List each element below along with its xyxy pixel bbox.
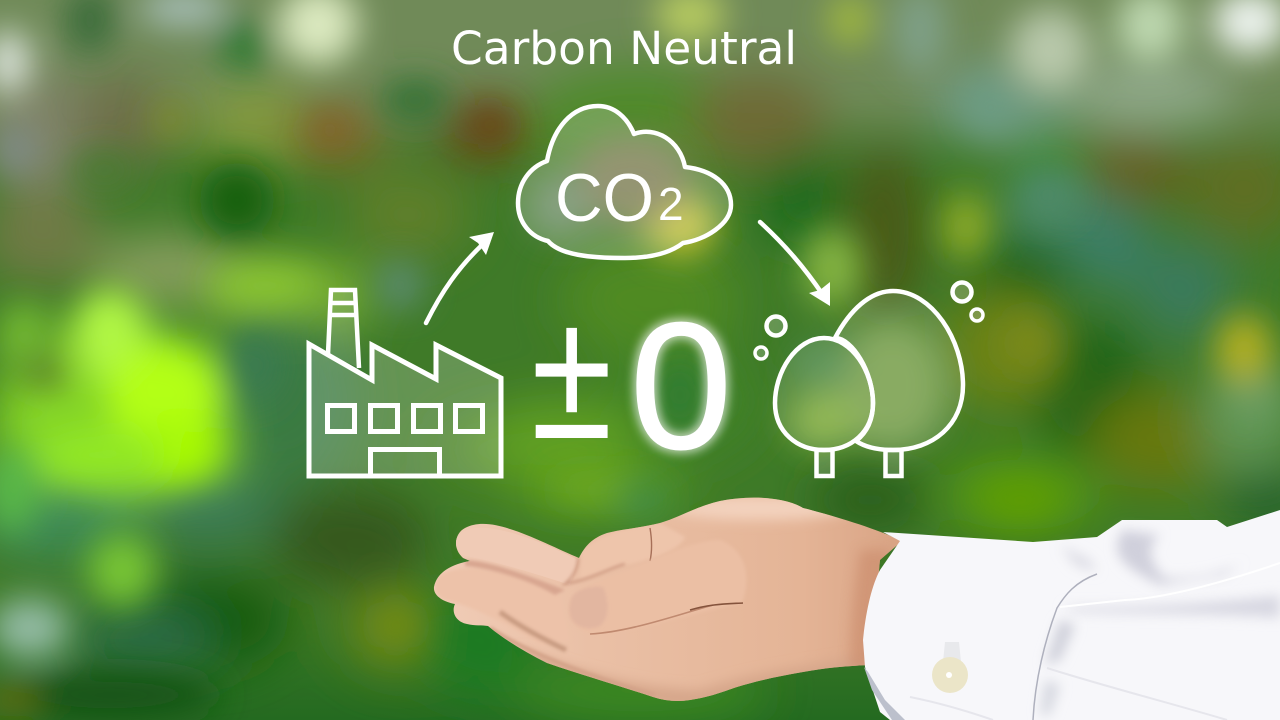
title: Carbon Neutral xyxy=(451,22,797,75)
icon: CO2 cloud: CO xyxy=(555,160,654,236)
cuff underside xyxy=(864,667,905,720)
arrow: factory to cloud xyxy=(426,232,494,323)
plus-minus sign: ± xyxy=(531,271,612,478)
index finger base xyxy=(580,522,682,560)
fingers xyxy=(456,535,577,582)
thumb nail xyxy=(572,588,606,626)
icon: CO2 cloud: 2 xyxy=(658,178,684,230)
icon: CO2 cloud xyxy=(518,106,731,258)
factory chimney xyxy=(328,290,359,368)
lower palm shading xyxy=(523,650,865,701)
top of hand highlight xyxy=(670,496,850,520)
zero numeral with glow: 0 xyxy=(630,286,732,487)
hand xyxy=(434,498,900,701)
hairy knuckle crease xyxy=(500,612,566,650)
zero numeral with glow: 0 xyxy=(630,286,732,487)
finger shadow xyxy=(565,558,625,584)
shirt button xyxy=(932,642,968,693)
cuff seam xyxy=(1033,574,1097,720)
factory windows xyxy=(328,406,482,476)
thumb crease xyxy=(590,605,713,634)
icon: trees xyxy=(755,282,983,476)
wrist shading xyxy=(850,550,890,670)
plus-minus sign: ± xyxy=(531,271,612,478)
fold shading xyxy=(1117,530,1245,585)
thumb xyxy=(650,544,745,603)
icon: factory xyxy=(309,290,501,476)
arrow: cloud to trees xyxy=(760,222,830,306)
shirt sleeve xyxy=(863,510,1280,720)
